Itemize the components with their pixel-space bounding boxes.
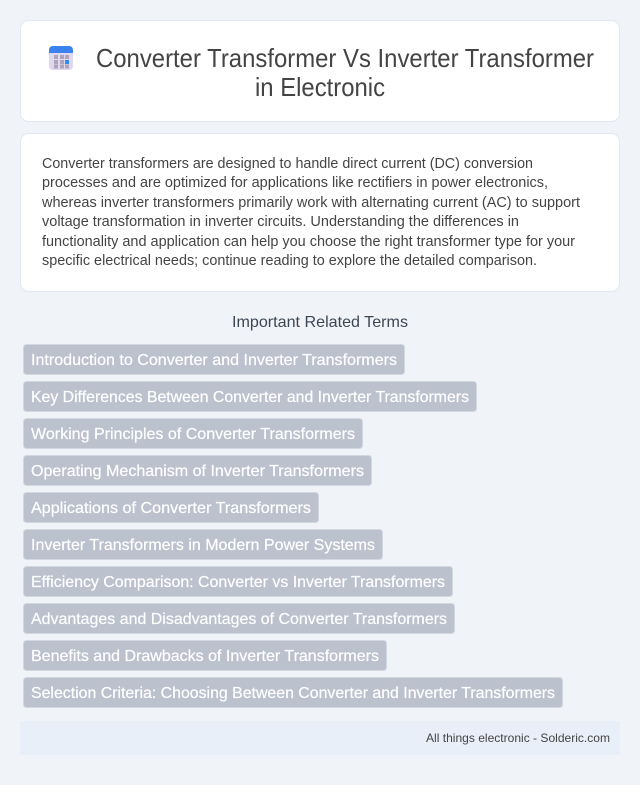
tag 1: Introduction to Converter and Inverter Transformers	[31, 352, 397, 369]
text block: introduction: processes and are optimized for applications like rectifiers in power electronics,	[42, 175, 548, 191]
tag 10: Selection Criteria: Choosing Between Converter and Inverter Transformers	[31, 685, 555, 702]
tag 2	[24, 382, 476, 412]
title: in Electronic	[255, 74, 385, 102]
tag 3: Working Principles of Converter Transformers	[31, 426, 355, 443]
tag 6: Inverter Transformers in Modern Power Systems	[31, 537, 375, 554]
text block: introduction	[41, 156, 580, 269]
tag 2: Key Differences Between Converter and Inverter Transformers	[31, 389, 469, 406]
tag 1	[24, 344, 404, 374]
list: related term tags	[24, 344, 562, 708]
tag 4: Operating Mechanism of Inverter Transformers	[31, 463, 364, 480]
tag 4	[24, 456, 372, 486]
title: Converter Transformer Vs Inverter Transformer	[96, 45, 594, 73]
tag 3	[24, 418, 362, 448]
heading: important related terms: Important Related Terms	[232, 314, 408, 331]
tag 9	[24, 640, 386, 670]
icon: calendar	[49, 46, 73, 70]
text block: introduction: Converter transformers are designed to handle direct current (DC) conversion	[42, 156, 533, 172]
tag 8	[24, 604, 454, 634]
tag 7	[24, 566, 452, 596]
text block: introduction: whereas inverter transformers primarily work with alternating current (AC) to support	[41, 195, 580, 211]
text block: introduction: voltage transformation in inverter circuits. Understanding the differences in	[42, 214, 519, 230]
footer: All things electronic - Solderic.com	[426, 731, 610, 745]
panel: title header	[20, 20, 620, 122]
panel: introduction	[20, 134, 620, 292]
tag 6	[24, 530, 382, 560]
tag 7: Efficiency Comparison: Converter vs Inverter Transformers	[31, 574, 445, 591]
tag 8: Advantages and Disadvantages of Converter Transformers	[31, 611, 447, 628]
title	[96, 45, 594, 102]
text block: introduction: specific electrical needs; continue reading to explore the detailed comparison.	[42, 253, 537, 269]
text block: introduction: functionality and application can help you choose the right transformer type for your	[42, 234, 575, 250]
tag 10	[24, 678, 562, 708]
tag 9: Benefits and Drawbacks of Inverter Transformers	[31, 648, 379, 665]
footer	[20, 721, 620, 755]
tag 5	[24, 492, 318, 522]
tag 5: Applications of Converter Transformers	[31, 500, 311, 517]
